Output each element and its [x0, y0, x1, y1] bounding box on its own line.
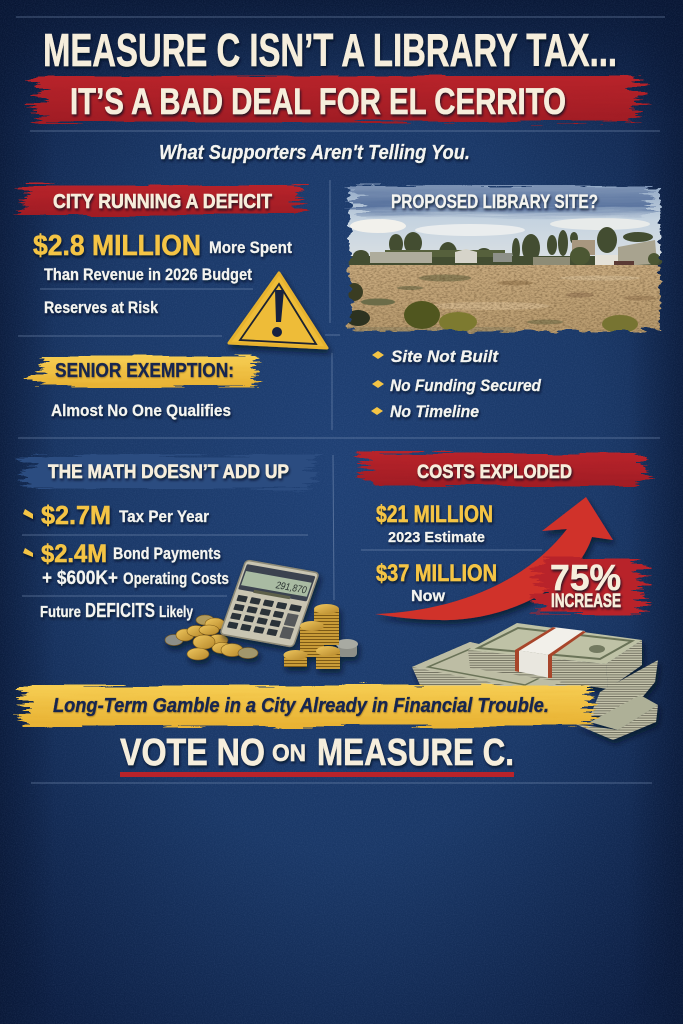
tax per year line: $2.7M: [41, 500, 111, 530]
panel: costs exploded: [361, 453, 643, 620]
reserves text: Reserves at Risk: [44, 299, 159, 317]
dirt field: [340, 265, 670, 335]
bullet: no timeline: No Timeline: [390, 402, 479, 421]
bond payments line: Bond Payments: [113, 544, 221, 563]
current cost figure: Now: [411, 588, 446, 605]
panel: site status bullets: [371, 347, 542, 421]
deficit description: More Spent: [209, 239, 292, 257]
deficit heading: CITY RUNNING A DEFICIT: [53, 190, 272, 213]
call to action: [120, 732, 514, 777]
icon: calculator: [220, 560, 319, 647]
future deficits line: Future: [40, 604, 81, 621]
arrow: rising cost: [375, 497, 613, 620]
photo heading band: [358, 186, 650, 218]
icon: warning triangle: [229, 273, 327, 348]
panel: city running a deficit: [26, 185, 298, 317]
icon: cash stacks: [412, 623, 658, 740]
photo heading band: PROPOSED LIBRARY SITE?: [391, 191, 598, 213]
headline banner: IT’S A BAD DEAL FOR EL CERRITO: [70, 81, 566, 122]
75% increase badge: INCREASE: [551, 591, 621, 612]
lower cash stack: [412, 642, 658, 740]
deficit heading: [26, 185, 298, 215]
bullet: no funding secured: No Funding Secured: [390, 376, 542, 395]
upper cash stack: [468, 623, 642, 689]
bullet: site not built: Site Not Built: [391, 347, 499, 366]
deficit amount: $2.8 MILLION: [33, 230, 201, 262]
future deficits line: DEFICITS: [85, 600, 155, 622]
2023 estimate figure: 2023 Estimate: [388, 529, 485, 546]
operating costs line: + $600K+: [42, 568, 118, 589]
senior exemption heading: SENIOR EXEMPTION:: [55, 359, 234, 382]
call to action: ON: [272, 740, 306, 767]
panel: senior exemption: [37, 356, 255, 420]
math heading: THE MATH DOESN’T ADD UP: [48, 461, 289, 483]
yellow callout banner: Long-Term Gamble in a City Already in Financial Trouble.: [53, 694, 549, 717]
buildings: [370, 252, 432, 263]
costs heading: [365, 453, 643, 486]
deficit description: Than Revenue in 2026 Budget: [44, 266, 252, 284]
icon: calculator: 291,870: [274, 580, 309, 596]
panel: the math doesn't add up: [22, 456, 312, 622]
current cost figure: [376, 560, 497, 605]
panel: proposed library site photo: [340, 180, 670, 335]
75% increase badge: 75%: [550, 557, 621, 598]
senior exemption note: Almost No One Qualifies: [51, 402, 231, 420]
2023 estimate figure: [376, 501, 493, 546]
call to action: VOTE NO: [120, 732, 265, 774]
operating costs line: [42, 568, 229, 589]
future deficits line: Likely: [159, 604, 193, 621]
icon: coin stacks: [284, 604, 358, 669]
calculator keys: [227, 595, 302, 639]
subtitle: What Supporters Aren't Telling You.: [159, 142, 470, 164]
math heading: [26, 456, 312, 489]
current cost figure: $37 MILLION: [376, 560, 497, 587]
deficit description: [44, 239, 292, 284]
distant trees: [340, 227, 670, 266]
operating costs line: Operating Costs: [123, 569, 229, 588]
senior exemption heading: [37, 356, 255, 387]
bond payments line: [23, 540, 221, 568]
icon: loose coins: [165, 615, 258, 660]
future deficits line: [40, 600, 193, 622]
photo of empty lot: [340, 180, 670, 335]
costs heading: COSTS EXPLODED: [417, 461, 572, 483]
2023 estimate figure: $21 MILLION: [376, 501, 493, 528]
shrubs: [348, 283, 363, 301]
near trees: [570, 247, 660, 265]
75% increase badge: [538, 557, 643, 613]
bond payments line: $2.4M: [41, 540, 107, 568]
tax per year line: Tax Per Year: [119, 507, 209, 526]
tax per year line: [23, 500, 209, 530]
call to action: MEASURE C.: [317, 732, 514, 774]
yellow callout banner: [24, 685, 590, 726]
